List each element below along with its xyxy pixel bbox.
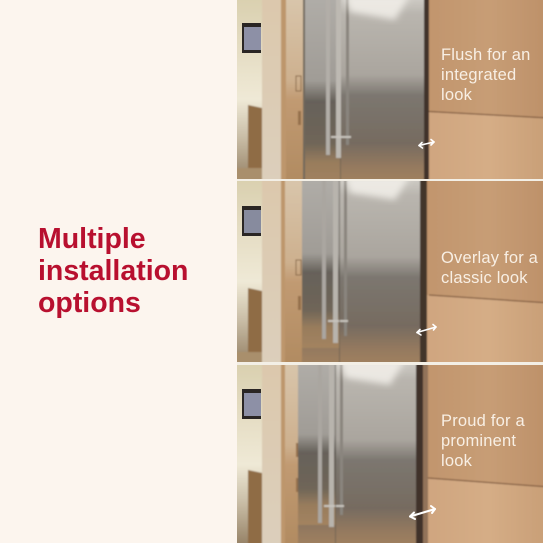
title: installation: [38, 255, 188, 287]
label: overlay: classic look: [441, 269, 528, 287]
title: [38, 223, 188, 319]
label: flush: Flush for an: [441, 46, 531, 64]
picture frame: [242, 389, 261, 419]
label: overlay: Overlay for a: [441, 249, 539, 267]
label: proud: Proud for a: [441, 412, 525, 430]
panel: overlay installation: [230, 176, 543, 368]
panel: proud installation: [230, 360, 543, 543]
label: flush: integrated: [441, 66, 516, 84]
picture frame: [242, 23, 261, 53]
panel: flush installation: [230, 0, 543, 185]
title: Multiple: [38, 223, 146, 255]
label: overlay: [442, 251, 538, 283]
title: options: [38, 287, 141, 319]
picture frame: [242, 206, 261, 236]
arrow: proud gap: [410, 506, 435, 519]
label: proud: look: [441, 452, 473, 470]
label: flush: [442, 48, 530, 100]
arrow: overlay gap: [417, 324, 436, 335]
label: flush: look: [441, 86, 473, 104]
arrow: flush gap: [419, 140, 434, 148]
label: proud: [442, 414, 525, 466]
label: proud: prominent: [441, 432, 516, 450]
